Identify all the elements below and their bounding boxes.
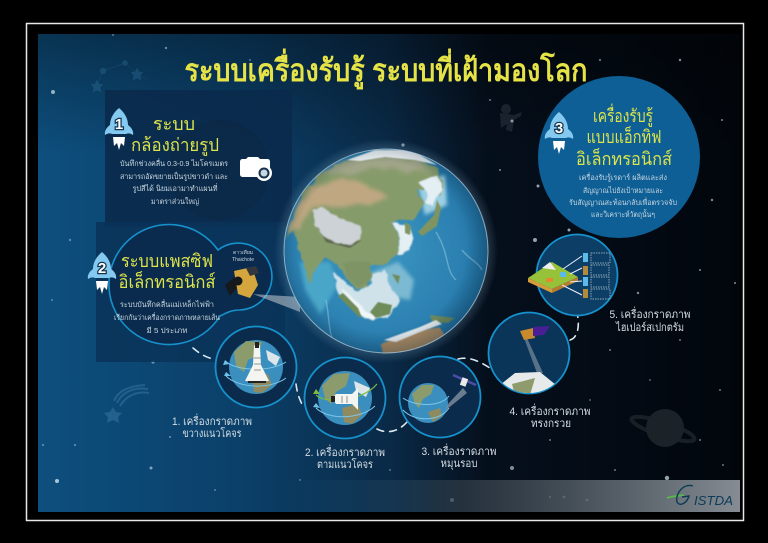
star field [42, 34, 736, 502]
satellite THAICHOTE: Thaichote [232, 257, 254, 263]
description: และวิเคราะห์วัตถุนั้นๆ [591, 209, 655, 219]
heading [118, 251, 216, 292]
spectral charts [591, 253, 610, 299]
globe [318, 371, 372, 425]
land: Indonesia [338, 274, 455, 323]
beam from satellite to earth [253, 294, 300, 312]
scanner 3: spin [400, 356, 480, 438]
land: Siberia band [320, 156, 432, 175]
heading [576, 103, 672, 169]
panel: camera system [105, 90, 292, 227]
blue circle: active electronic system [538, 76, 700, 238]
heading [131, 114, 219, 156]
callout bubble [109, 225, 272, 345]
label 4: 4. เครื่องกราดภาพ [510, 403, 590, 418]
description: สามารถอัดขยายเป็นรูปขาวดำ และ [120, 171, 228, 181]
white shelves [393, 175, 443, 256]
label 4 [510, 403, 590, 430]
label 5 [610, 306, 690, 334]
land: SE Asia peninsula [345, 262, 374, 285]
heading: ระบบ [153, 114, 195, 134]
heading: อิเล็กทรอนิกส์ [118, 270, 216, 292]
icon: rocket 3: 3 [555, 120, 563, 137]
astronaut decoration [500, 104, 522, 132]
description: มาตราส่วนใหญ่ [151, 197, 199, 206]
label 1: ขวางแนวโคจร [182, 426, 242, 440]
label 5: 5. เครื่องกราดภาพ [610, 306, 690, 321]
description [120, 158, 228, 206]
heading: แบบแอ็กทิฟ [586, 125, 662, 147]
satellite THAICHOTE: ดาวเทียม [233, 249, 253, 256]
description: เรียกกันว่าเครื่องกราดภาพหลายเส้น [114, 312, 220, 322]
label 4: ทรงกรวย [531, 418, 571, 430]
heading: อิเล็กทรอนิกส์ [576, 147, 672, 169]
scanner 5: hyperspectral [528, 234, 618, 316]
GISTDA logo: ISTDA [694, 493, 733, 508]
heading: ระบบแพสซิฟ [121, 251, 213, 271]
icon: rocket 1: 1 [115, 116, 123, 133]
land: Tibet shadow and snow [318, 228, 362, 248]
satellite [453, 375, 476, 387]
land: Asia [285, 152, 443, 290]
terrain block [528, 262, 578, 293]
label 2 [305, 444, 385, 471]
bottom strip with logo [280, 480, 740, 512]
label 1 [172, 413, 252, 440]
shooting star decoration [104, 385, 149, 423]
shuttle [331, 388, 358, 410]
icon: rocket 1 [105, 108, 133, 150]
shallow water patches [300, 175, 447, 315]
label 2: ตามแนวโคจร [317, 457, 373, 471]
land: Australia [380, 326, 444, 353]
label 2: 2. เครื่องกราดภาพ [305, 444, 385, 459]
cloud streaks [326, 232, 482, 345]
description: เครื่องรับรู้เรดาร์ ผลิตและส่ง [579, 172, 667, 182]
description: บันทึกช่วงคลื่น 0.3-0.9 ไมโครเมตร [120, 158, 228, 168]
title: ระบบเครื่องรับรู้ ระบบที่เฝ้ามองโลก [184, 48, 588, 90]
label 3: 3. เครื่องราดภาพ [422, 443, 496, 458]
description: รับสัญญาณสะท้อนกลับเพื่อตรวจจับ [569, 197, 677, 207]
shuttle [245, 342, 269, 383]
icon: rocket 3 [545, 112, 573, 154]
label 5: ไฮเปอร์สเปกตรัม [615, 321, 684, 334]
description [569, 172, 677, 219]
description: รูปสีได้ นิยมเอามาทำแผนที่ [132, 183, 218, 193]
icon: rocket 2: 2 [98, 260, 106, 277]
heading: กล้องถ่ายรูป [131, 135, 219, 156]
main globe [274, 139, 498, 363]
label 1: 1. เครื่องกราดภาพ [172, 413, 252, 428]
satellite [520, 326, 550, 340]
description: ระบบบันทึกคลื่นแม่เหล็กไฟฟ้า [120, 299, 214, 309]
satellite THAICHOTE [225, 249, 259, 298]
scanner labels [172, 306, 690, 471]
scanner 1: across-track [216, 326, 296, 408]
description: สัญญาณไปยังเป้าหมายและ [583, 186, 663, 195]
panel: passive electronic system [88, 222, 285, 362]
description [114, 299, 220, 335]
label 3 [422, 443, 496, 470]
icon: rocket 2 [88, 252, 116, 294]
globe [229, 340, 283, 394]
sample bars [583, 253, 588, 298]
GISTDA logo [667, 485, 733, 508]
scanner 2: along-track [304, 358, 386, 438]
dashed connectors [193, 313, 578, 432]
saturn decoration [629, 409, 697, 447]
icon: camera [240, 157, 272, 181]
land: Japan and Korea [405, 200, 441, 236]
globe [408, 383, 448, 423]
heading: เครื่องรับรู้ [593, 103, 653, 127]
constellation decoration [91, 60, 147, 92]
label 3: หมุนรอบ [440, 458, 478, 470]
land: central Asia desert [287, 178, 388, 232]
description: มี 5 ประเภท [146, 326, 188, 335]
scanner 4: whisk-broom [488, 312, 570, 394]
shelf: South China Sea and Sunda [333, 270, 400, 320]
ice north [347, 150, 437, 165]
